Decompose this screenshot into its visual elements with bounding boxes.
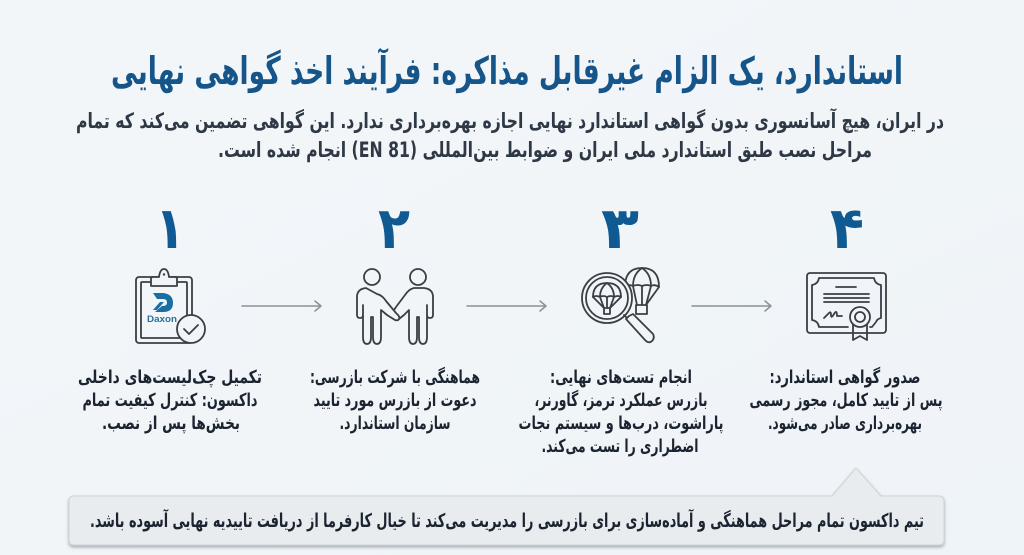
- intro paragraph: مراحل نصب طبق استاندارد ملی ایران و ضوابط بین‌المللی (EN 81) انجام شده است.: [218, 138, 872, 162]
- icon: two people shaking hands: [357, 269, 433, 344]
- step 1 text: بخش‌ها پس از نصب.: [102, 413, 240, 434]
- step 1 text: تکمیل چک‌لیست‌های داخلی: [78, 367, 262, 388]
- step 1 text: [78, 367, 262, 434]
- arrow 1: [242, 301, 321, 311]
- step 3 text: اضطراری را تست می‌کند.: [542, 436, 698, 457]
- step 3 text: پاراشوت، درب‌ها و سیستم نجات: [518, 413, 724, 434]
- icon: clipboard with Daxon logo and check: Daxon: [147, 314, 177, 325]
- icon: magnifier over parachute: [582, 268, 659, 342]
- step 2 text: [310, 366, 480, 434]
- icon: certificate with seal: [807, 273, 886, 340]
- step 2 number: ۲: [378, 194, 410, 262]
- icon: clipboard with Daxon logo and check: [136, 269, 205, 343]
- step 3 text: بازرس عملکرد ترمز، گاورنر،: [534, 389, 708, 411]
- step 3 number: ۳: [601, 194, 639, 262]
- arrow 3: [692, 301, 771, 311]
- step 1 number: ۱: [155, 194, 185, 262]
- step 3 text: انجام تست‌های نهایی:: [550, 367, 692, 388]
- step 2 text: دعوت از بازرس مورد تایید: [314, 390, 476, 411]
- step 2 text: سازمان استاندارد.: [340, 413, 450, 434]
- step 4 text: پس از تایید کامل، مجوز رسمی: [750, 390, 942, 411]
- step 4 number: ۴: [830, 194, 864, 262]
- step 4 text: صدور گواهی استاندارد:: [770, 366, 920, 388]
- step 2 text: هماهنگی با شرکت بازرسی:: [310, 366, 480, 388]
- arrow 2: [467, 301, 546, 311]
- step 4 text: [750, 366, 942, 434]
- callout box: [69, 468, 944, 545]
- intro paragraph: [76, 108, 944, 162]
- step 4 text: بهره‌برداری صادر می‌شود.: [768, 413, 922, 434]
- step 1 text: داکسون: کنترل کیفیت تمام: [82, 390, 258, 411]
- step 3 text: [518, 367, 724, 457]
